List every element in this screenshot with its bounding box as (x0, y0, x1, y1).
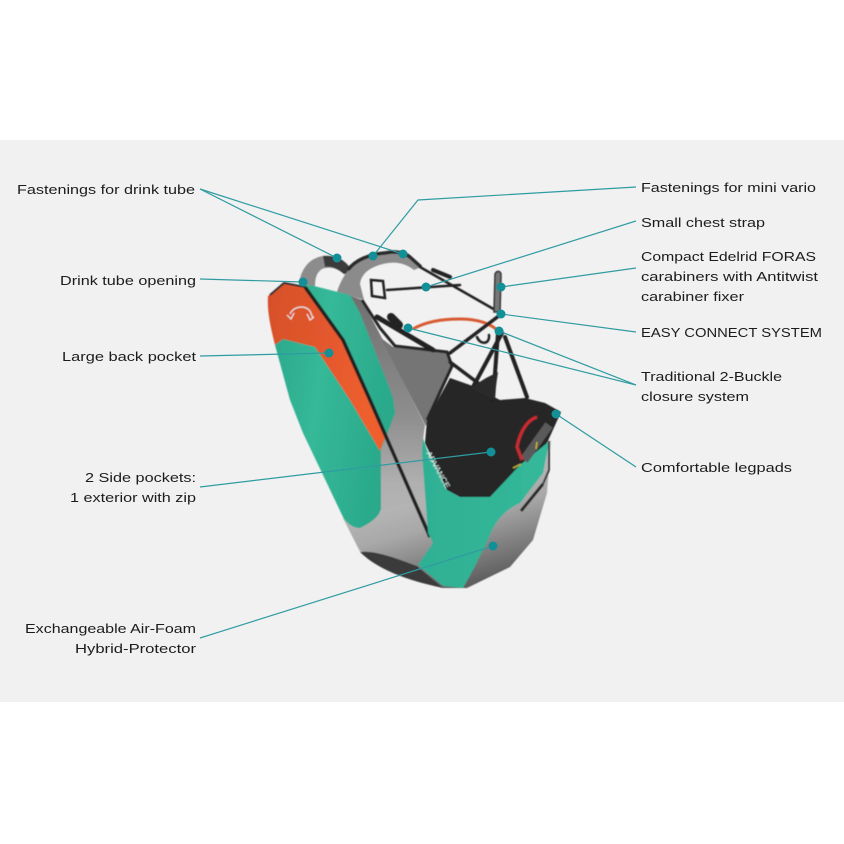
label: buckle closure: Traditional 2-Buckle (641, 369, 782, 384)
carabiner (494, 271, 501, 312)
right shoulder strap (337, 252, 421, 300)
pod rim (543, 441, 549, 484)
label: carabiners: Compact Edelrid FORAS (641, 249, 816, 264)
seat back border (362, 300, 452, 420)
label: side pockets (70, 470, 196, 505)
side flap (524, 425, 549, 460)
yellow clip (513, 442, 537, 468)
label: carabiners: carabiner fixer (641, 289, 745, 304)
label: buckle closure: closure system (641, 389, 749, 404)
label: carabiners: carabiners with Antitwist (641, 269, 818, 284)
label: carabiners (641, 249, 818, 304)
black seat (425, 378, 561, 497)
leader lines (200, 187, 636, 638)
label: protector (25, 621, 197, 656)
orange bar (413, 319, 496, 329)
label: protector: Exchangeable Air-Foam (25, 621, 196, 636)
back panel seam (305, 287, 430, 537)
label: fastenings for mini vario: Fastenings for mini vario (641, 180, 816, 195)
orange back panel (268, 283, 385, 451)
label: side pockets: 1 exterior with zip (70, 490, 196, 505)
left shoulder strap (299, 256, 350, 288)
strap base (470, 372, 498, 400)
label: drink tube opening: Drink tube opening (60, 273, 196, 288)
label: small chest strap: Small chest strap (641, 215, 765, 230)
label: easy connect system: EASY CONNECT SYSTEM (641, 325, 822, 340)
label: buckle closure (641, 369, 782, 404)
protector dark underside (360, 552, 443, 588)
lower protector shell (343, 440, 551, 588)
label: comfortable legpads: Comfortable legpads (641, 460, 793, 475)
callout dots (298, 250, 560, 550)
black straps (371, 267, 527, 400)
label: side pockets: 2 Side pockets: (85, 470, 196, 485)
grey body shell (343, 294, 433, 565)
seat back grey panel (381, 338, 452, 426)
label: fastenings for drink tube: Fastenings for drink tube (17, 182, 195, 197)
red handle (517, 417, 537, 460)
harness illustration (268, 252, 561, 588)
label: large back pocket: Large back pocket (62, 349, 196, 364)
background panel (0, 140, 844, 702)
logo on back panel (287, 307, 314, 320)
teal front panel (418, 438, 549, 588)
rear teal panel (275, 285, 395, 528)
brand name: ADVANCE (424, 450, 452, 490)
side pocket zip (521, 484, 543, 511)
label: protector: Hybrid-Protector (75, 641, 197, 656)
